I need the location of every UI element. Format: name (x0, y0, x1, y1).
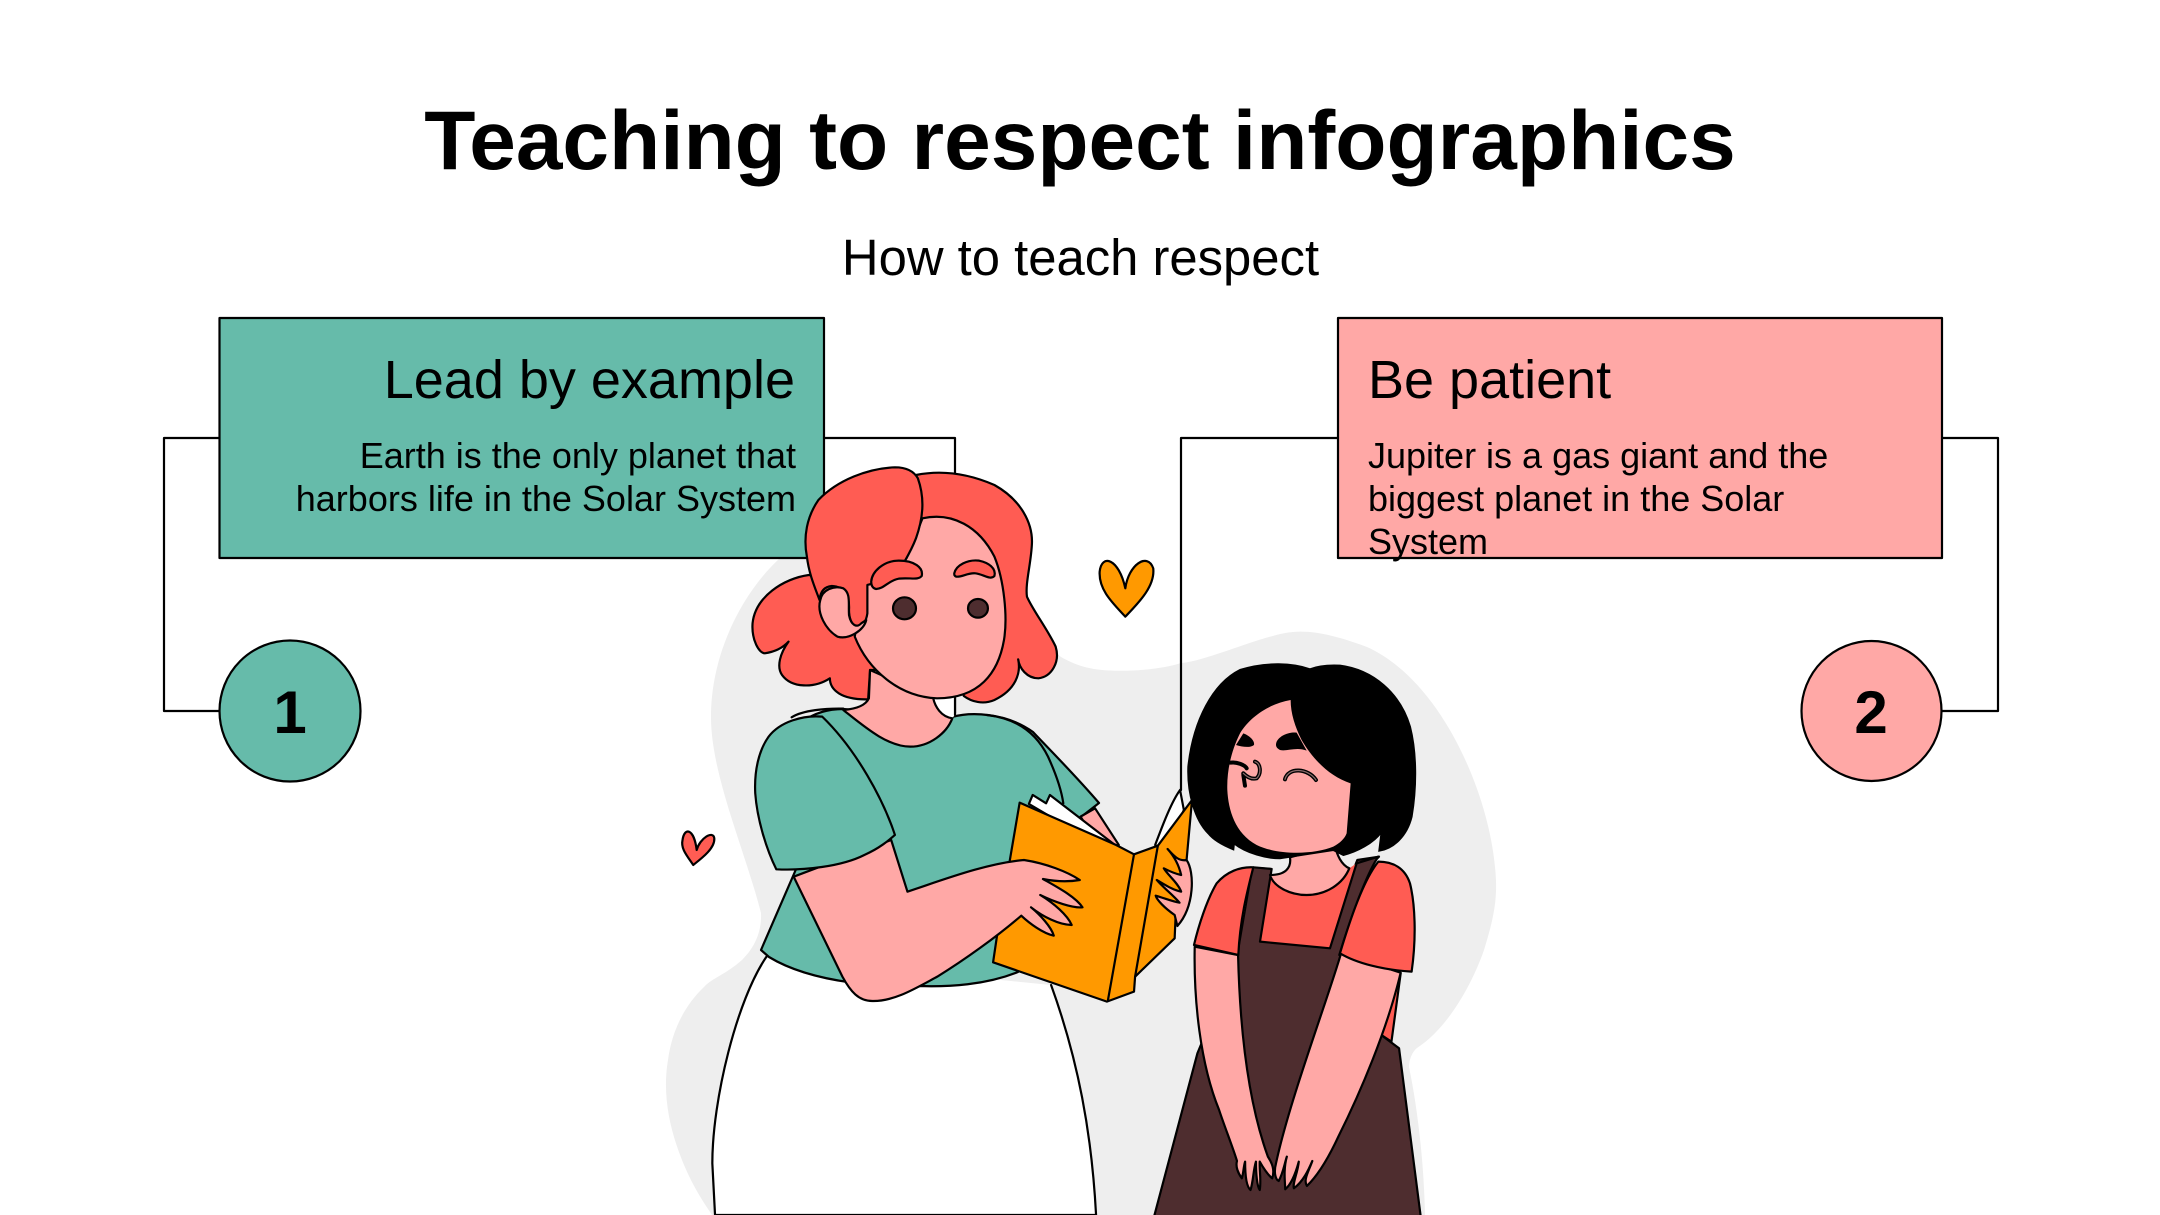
woman shirt body (761, 709, 1099, 986)
girl arms (1195, 947, 1401, 1190)
heading: be patient: Be patient (1368, 350, 1611, 410)
woman skirt (712, 957, 1096, 1215)
girl shirt and hair (1188, 664, 1415, 955)
icon: orange heart (1100, 561, 1153, 617)
number badge 2: 2 (1854, 679, 1888, 746)
heading: lead by example: Lead by example (384, 350, 795, 410)
open book (993, 800, 1192, 1002)
illustration: woman (712, 467, 1192, 1215)
panel: be patient (1338, 318, 1942, 562)
connector: card 1 to circle 1 (164, 438, 955, 713)
number badge 1 (220, 640, 360, 782)
text: earth description: harbors life in the Solar System (296, 478, 796, 519)
text: jupiter description: System (1368, 521, 1488, 562)
woman sleeve and head (752, 467, 1057, 870)
woman arm and hands (794, 840, 1192, 1001)
connector: card 2 to circle 2 (1181, 438, 1998, 790)
text: jupiter description: biggest planet in the Solar (1368, 478, 1784, 519)
girl sleeves (1194, 862, 1415, 972)
text: jupiter description: Jupiter is a gas giant and the (1368, 435, 1828, 476)
icon: red heart (682, 831, 714, 865)
panel: lead by example (220, 318, 824, 558)
text: earth description: Earth is the only planet that (360, 435, 796, 476)
woman upper details (987, 715, 1184, 853)
background blob (666, 480, 1496, 1215)
title: Teaching to respect infographics (424, 93, 1736, 187)
number badge 2 (1802, 641, 1942, 781)
subtitle: How to teach respect (842, 229, 1319, 286)
girl dress and shirt back (1154, 857, 1421, 1215)
illustration: girl (1154, 664, 1421, 1215)
number badge 1: 1 (273, 679, 307, 746)
